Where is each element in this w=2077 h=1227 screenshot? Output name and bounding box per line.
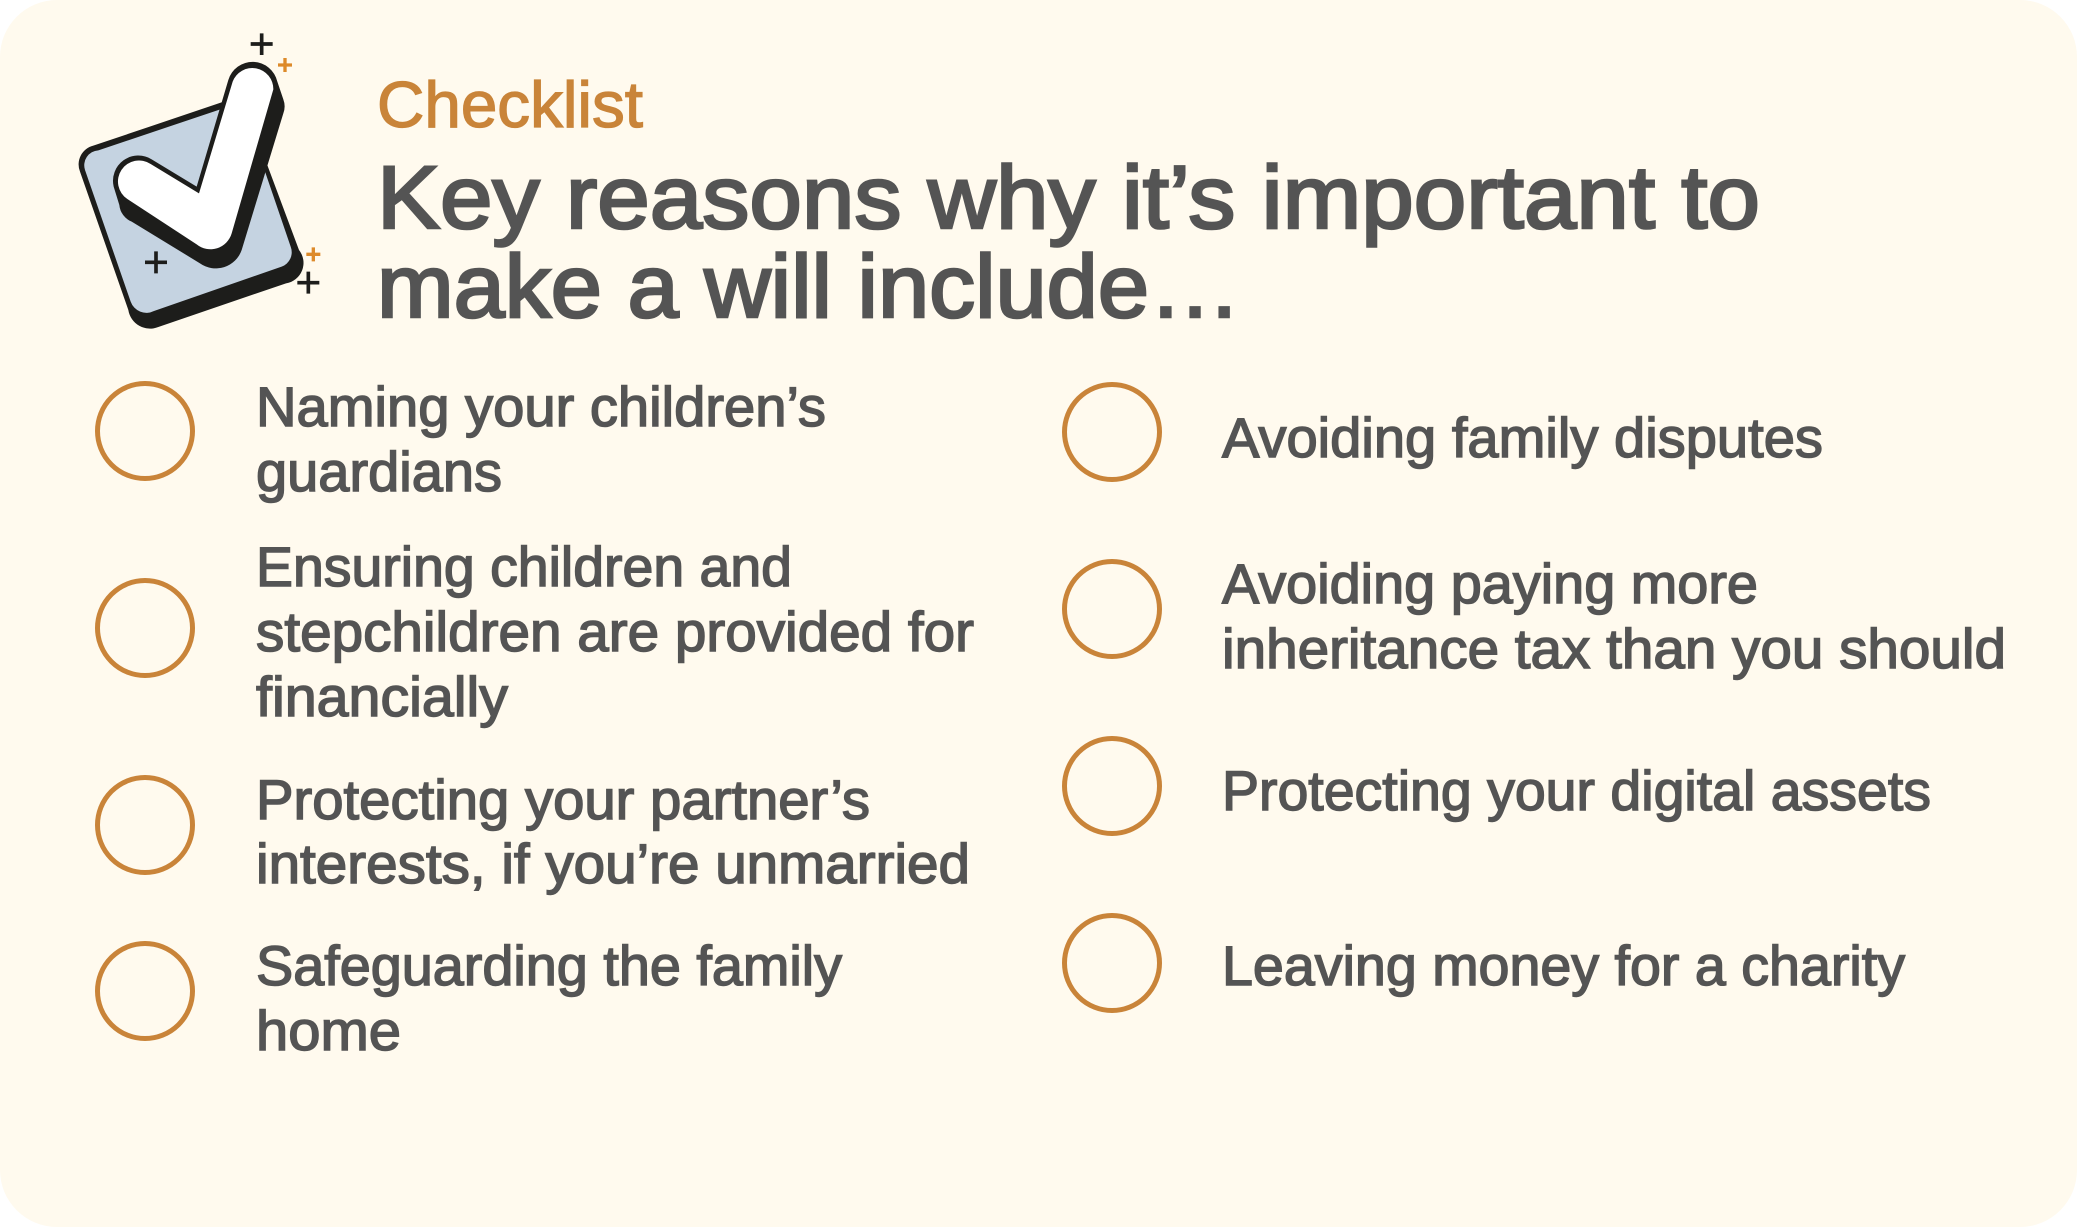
checklist item: family home (98, 934, 842, 1062)
checklist item: protecting partner: Protecting your partner’s (256, 768, 870, 831)
checklist item: naming guardians: Naming your children’s (256, 375, 826, 438)
checklist item: charity (1064, 916, 1905, 1010)
checklist item: family home: home (256, 999, 401, 1062)
checklist item: children provided for: Ensuring children and (256, 535, 792, 598)
title: make a will include… (377, 236, 1241, 336)
checklist item: children provided for (98, 535, 974, 728)
checklist item: charity: Leaving money for a charity (1222, 934, 1905, 997)
checklist item: naming guardians: guardians (256, 440, 502, 503)
checklist item: family disputes: Avoiding family disputes (1222, 406, 1823, 469)
title: Key reasons why it’s important to (377, 147, 1760, 247)
checklist item: inheritance tax (1064, 552, 2006, 680)
checklist item: inheritance tax: Avoiding paying more (1222, 552, 1758, 615)
checklist item: inheritance tax: inheritance tax than you should (1222, 617, 2006, 680)
heading: Checklist: Checklist (377, 68, 643, 141)
checklist item: digital assets: Protecting your digital assets (1222, 759, 1931, 822)
checklist item: protecting partner: interests, if you’re unmarried (256, 832, 970, 895)
checklist item: naming guardians (98, 375, 826, 503)
checklist item: family disputes (1064, 384, 1823, 480)
checklist item: protecting partner (98, 768, 970, 895)
checklist item: digital assets (1064, 738, 1931, 834)
title (377, 147, 1760, 336)
icon: tilted checkbox with tick (79, 33, 320, 329)
checklist item: children provided for: financially (256, 665, 508, 728)
checklist item: family home: Safeguarding the family (256, 934, 842, 997)
checklist item: children provided for: stepchildren are provided for (256, 600, 974, 663)
